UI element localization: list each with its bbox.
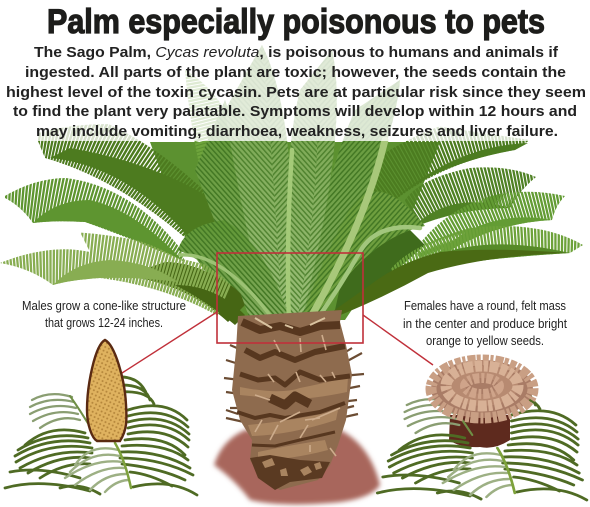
trunk body (232, 310, 352, 490)
male caption: Males grow a cone-like structure (22, 299, 186, 313)
trunk base (250, 455, 330, 490)
frond: left middle green (5, 197, 190, 260)
trunk dark bands (237, 322, 350, 446)
female plant foliage (377, 382, 587, 500)
dark underside of left fronds (175, 285, 245, 325)
midribs of central fronds (180, 140, 420, 327)
ground shadow (214, 430, 380, 504)
frond base cream tips (255, 318, 325, 328)
female caption: Females have a round, felt mass (404, 299, 566, 313)
intro text: may include vomiting, diarrhoea, weakness, seizures and liver failure. (36, 123, 558, 140)
dark underside of right fronds (312, 250, 568, 326)
frond: upper-left dark (38, 140, 228, 255)
frond: right lowest (392, 244, 583, 278)
female base (449, 415, 510, 448)
female caption (403, 299, 567, 348)
frond: right third (415, 196, 565, 268)
intro text: to find the plant very palatable. Symptoms will develop within 12 hours and (13, 103, 577, 120)
trunk (224, 310, 364, 490)
female caption: orange to yellow seeds. (426, 334, 544, 348)
central green mass behind fronds (150, 142, 440, 320)
title: Palm especially poisonous to pets (47, 3, 545, 41)
male plant foliage (5, 377, 197, 495)
trunk tan spines (255, 335, 340, 456)
intro text: The Sago Palm, Cycas revoluta , is poisonous to humans and animals if (34, 44, 559, 61)
trunk base highlights (262, 458, 322, 476)
male caption (22, 299, 186, 330)
intro text: highest level of the toxin cycasin. Pets are at particular risk since they seem (6, 84, 586, 101)
left callout line (122, 312, 217, 373)
female caption: in the center and produce bright (403, 317, 567, 331)
center fan fronds (175, 40, 428, 330)
female felt mass (431, 360, 533, 418)
male caption: that grows 12-24 inches. (45, 316, 163, 330)
trunk outer spines (224, 345, 364, 422)
frond: upper-right (372, 142, 528, 208)
right callout line (363, 315, 433, 365)
dark back frond at right of box (335, 230, 425, 310)
trunk lighter bands (240, 377, 348, 460)
intro text (6, 44, 586, 140)
frond: right second (405, 177, 536, 228)
male cone (87, 340, 126, 441)
red callout box (217, 253, 363, 343)
white veil behind the text (0, 0, 590, 141)
frond: lower-left pale with dark underside (0, 260, 250, 322)
intro text: ingested. All parts of the plant are toxic; however, the seeds contain the (25, 64, 566, 81)
